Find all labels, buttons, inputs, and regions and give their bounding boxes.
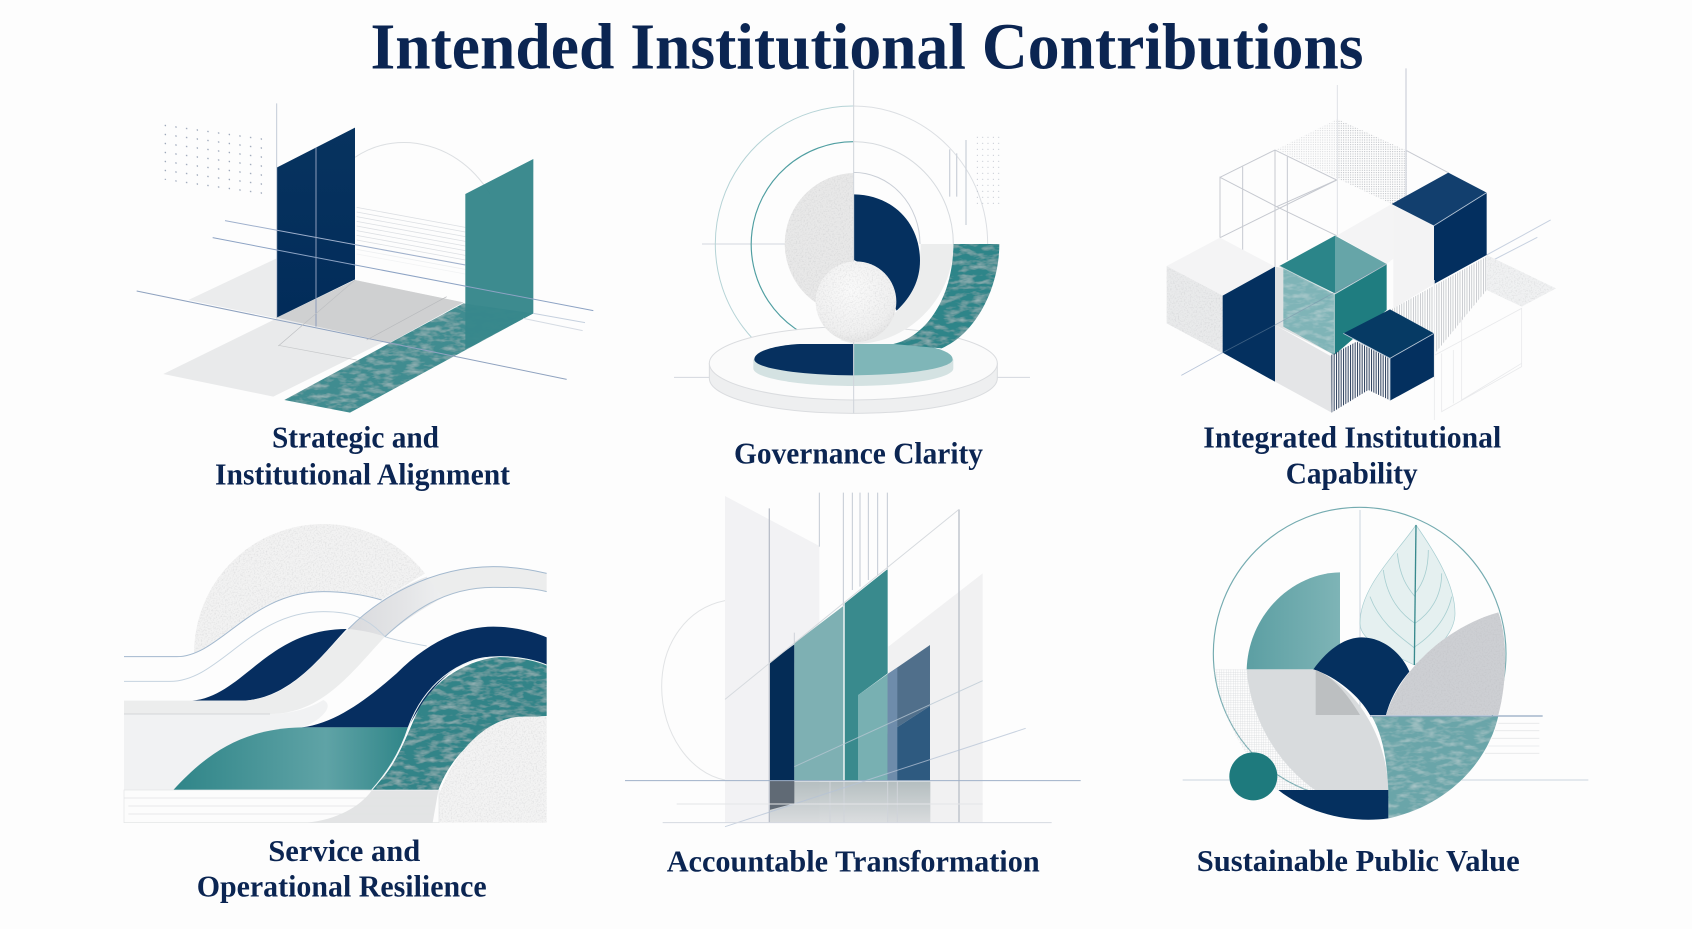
diagonal rules — [725, 509, 1026, 827]
label: Accountable Transformation — [667, 845, 1040, 879]
navy half circle — [1313, 637, 1409, 715]
left grey block — [1167, 238, 1334, 413]
pale teal front pane — [858, 674, 888, 781]
soft shadow diamond — [1487, 255, 1556, 307]
navy bar — [769, 644, 794, 810]
illustration: two vertical planes on a floor — [137, 103, 593, 413]
label: Operational Resilience — [197, 870, 487, 904]
platform — [709, 327, 997, 413]
teal lower section — [1372, 716, 1498, 818]
arc behind the planes — [355, 142, 490, 194]
faint arc — [662, 601, 725, 780]
hatched shadow — [1390, 257, 1487, 353]
panel: sustainable public value — [1183, 507, 1588, 878]
outer circle — [1213, 507, 1506, 800]
illustration: rising translucent planes — [625, 493, 1081, 827]
teal wave right — [370, 657, 547, 790]
panel: governance clarity — [674, 70, 1030, 470]
large textured half sphere — [785, 173, 853, 303]
axis rules — [1183, 510, 1588, 790]
grey floor — [163, 258, 463, 397]
wireframe lines — [1220, 68, 1551, 267]
grey large petal — [1247, 669, 1388, 790]
label: Service and — [268, 834, 420, 868]
panel: strategic and institutional alignment — [137, 103, 593, 491]
white wave layer — [124, 592, 443, 723]
teal plane — [465, 159, 533, 349]
central axis — [852, 70, 855, 413]
label — [1203, 421, 1501, 490]
speckled sun — [194, 524, 425, 653]
leaf — [1360, 525, 1455, 665]
navy small cube — [1343, 309, 1434, 401]
label — [215, 421, 511, 491]
navy wave large — [302, 627, 547, 727]
speckled lower right — [433, 717, 547, 823]
teal quarter — [1247, 572, 1340, 669]
horizontal hatch between planes — [357, 207, 465, 274]
label: Governance Clarity — [734, 436, 983, 470]
grey panels — [725, 496, 983, 823]
navy plane — [277, 128, 355, 318]
label: Institutional Alignment — [215, 457, 511, 491]
label — [197, 834, 487, 904]
navy wave small — [192, 629, 347, 701]
illustration: layered waves — [124, 524, 547, 823]
pale lower band — [124, 700, 328, 790]
label: Strategic and — [272, 421, 439, 455]
small teal circle — [1229, 752, 1277, 800]
navy quarter — [854, 194, 920, 311]
teal bowl — [893, 244, 999, 348]
navy upper cube — [1392, 173, 1487, 284]
grey band — [124, 567, 547, 714]
title: Intended Institutional Contributions — [370, 11, 1364, 84]
ground with rules — [124, 790, 439, 823]
slate pane — [888, 645, 930, 781]
hatched leaf — [1213, 669, 1315, 790]
teal bar — [845, 569, 888, 781]
teal cube — [1279, 236, 1387, 355]
label: Integrated Institutional — [1203, 421, 1501, 455]
foreground wires — [1181, 264, 1522, 420]
ground rules — [625, 781, 1081, 823]
navy bottom section — [1278, 790, 1388, 820]
panel: accountable transformation — [625, 493, 1081, 879]
label: Capability — [1286, 456, 1418, 490]
base lines — [674, 244, 1030, 377]
vertical rules — [769, 493, 959, 823]
band shading — [348, 577, 443, 637]
panel: integrated institutional capability — [1167, 68, 1556, 490]
guide lines — [137, 103, 593, 379]
teal wave left — [173, 727, 408, 790]
small sphere — [816, 261, 896, 342]
teal floor strip — [284, 303, 533, 413]
illustration: isometric cubes — [1167, 68, 1556, 420]
illustration: spheres and rings on a disc — [674, 70, 1030, 413]
light teal bar — [794, 606, 843, 781]
flowing contour lines — [124, 567, 547, 714]
reflection band — [769, 782, 930, 823]
dark hatched face — [1331, 342, 1389, 413]
grey crescent — [840, 244, 953, 344]
white middle block — [1337, 204, 1434, 308]
grey overlay square — [1316, 670, 1360, 715]
navy left cube — [1223, 267, 1275, 382]
label: Sustainable Public Value — [1197, 844, 1520, 878]
dot grid — [163, 121, 267, 198]
grey textured petal — [1386, 612, 1505, 715]
concentric rings — [715, 106, 988, 357]
dotted back wall — [1277, 119, 1407, 204]
panel: service and operational resilience — [124, 524, 547, 904]
rules to the right — [1370, 716, 1543, 753]
illustration: leaf inside a circle — [1183, 507, 1588, 820]
white edge on teal — [372, 657, 547, 790]
small vertical bars and dots — [950, 136, 1001, 225]
